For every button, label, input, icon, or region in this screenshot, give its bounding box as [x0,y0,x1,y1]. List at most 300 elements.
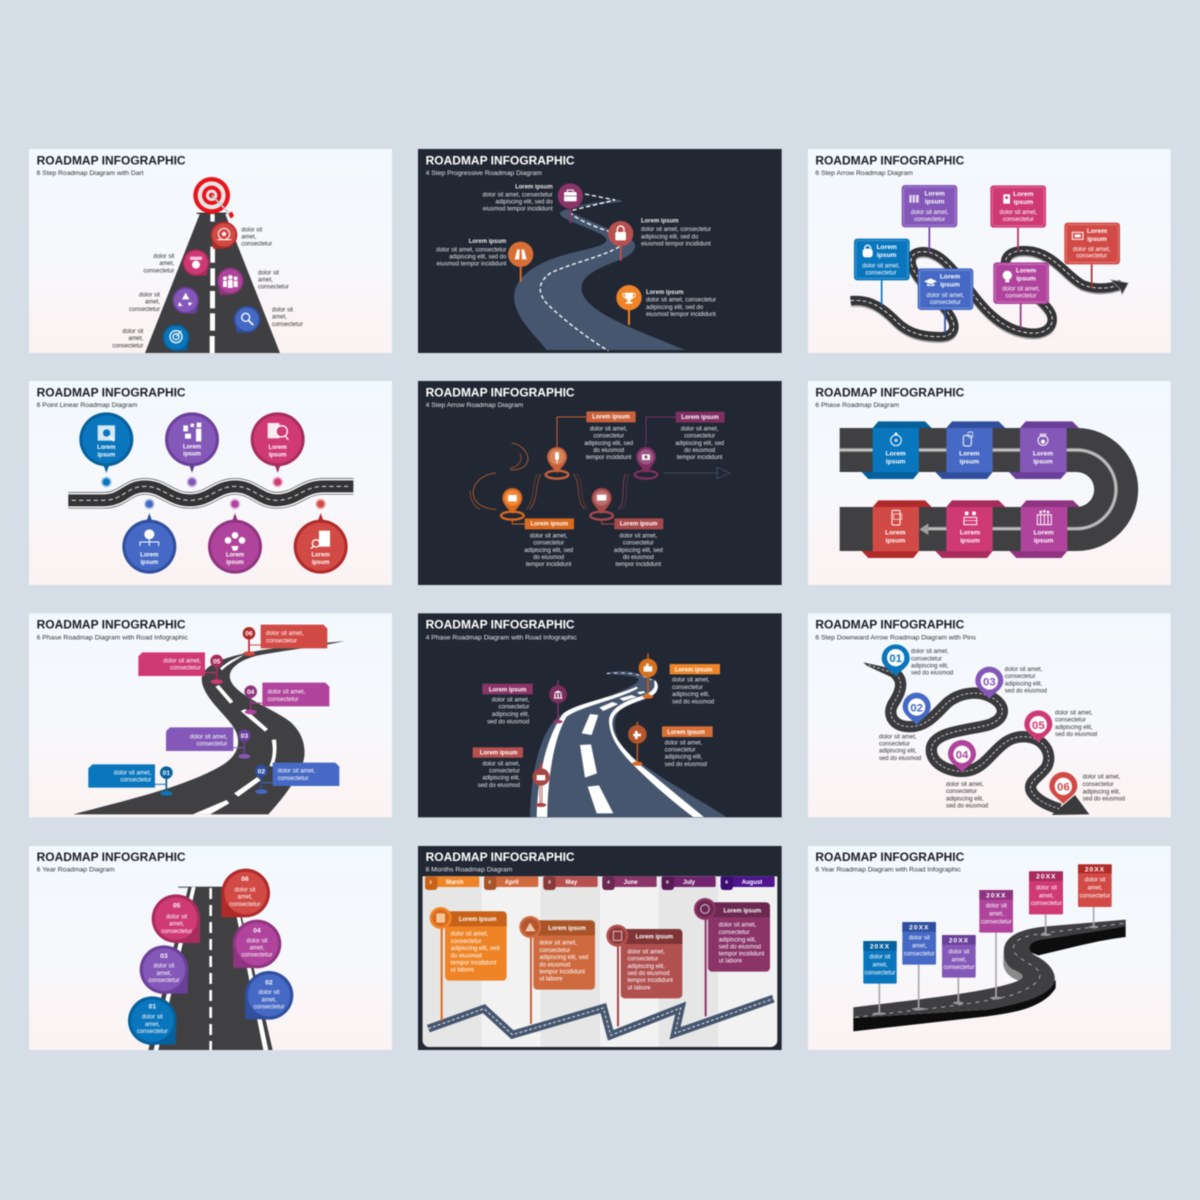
card: June: consectetur [719,930,750,936]
labels: amet, [145,300,160,306]
pin 06: 06 [1057,782,1070,794]
text blocks: adipiscing elit, [879,749,917,755]
callout: pink [138,652,205,676]
pin 05: 05 [1032,720,1045,732]
pin 01: dolor sit [142,1015,163,1021]
card: April: dolor sit amet, [539,941,577,947]
label: brown: consectetur [665,748,696,754]
card: April: tempor incididunt [539,969,585,975]
text blocks: adipiscing elit, sed do [495,199,553,205]
pin 03 [233,729,251,759]
text blocks: adipiscing elit, [946,796,984,802]
month tab: May: May [566,880,578,886]
phase: pink [935,500,1005,558]
card: blue [854,239,910,280]
marker: indigo [144,499,155,509]
card: indigo [918,268,973,310]
card: magenta: dolor sit amet, [1002,287,1040,293]
connectors [512,417,676,524]
signpost: red [1078,864,1112,928]
card: indigo: dolor sit amet, [927,293,964,299]
phase: purple [1009,421,1079,479]
label: brick: sed do eiusmod [478,783,520,789]
text blocks: adipiscing elit, [1055,725,1093,731]
label: maroon: Lorem ipsum [489,688,526,694]
subtitle: 6 Months Roadmap Diagram [426,867,513,874]
text blocks: dolor sit amet, [911,649,949,655]
pin: step 5 magenta [217,268,244,295]
label: orange: dolor sit amet, [672,678,710,684]
text blocks: adipiscing elit, [911,663,949,669]
card: magenta [993,262,1049,304]
card: March: dolor sit amet, [451,932,489,938]
card: blue: ipsum [877,252,897,259]
pin 01 [128,996,177,1045]
phase: purple: ipsum [1033,459,1053,466]
callout: blue: consectetur [120,778,151,784]
callout: indigo: dolor sit amet, [278,769,316,775]
pin 03: 03 [983,676,996,688]
signpost: indigo: amet, [912,944,927,950]
month tab: June [602,876,657,890]
pin 02: 02 [258,768,265,775]
callout: indigo [273,763,339,786]
phase: pink: ipsum [960,538,980,545]
labels: amet, [159,261,175,267]
pole: blue [879,280,884,305]
marker: pink [272,477,283,487]
card: April: consectetur [539,948,570,954]
month tab: March: March [446,880,464,886]
pin 01: 01 [889,653,902,665]
marker: purple [187,477,197,487]
label: brick: adipiscing elit, [482,776,520,782]
label: maroon: consectetur [684,434,715,440]
pin 04: 04 [253,927,261,934]
signpost: red: amet, [1088,886,1103,892]
title: ROADMAP INFOGRAPHIC [815,618,965,632]
label: brick: tempor incididunt [586,455,632,461]
pin 02: amet, [262,997,277,1003]
text blocks: dolor sit amet, [946,782,984,788]
labels: dolor sit [241,227,263,233]
signpost: indigo: consectetur [904,951,935,957]
label: brick [473,747,523,789]
pin 04 [233,920,281,968]
pin 03: 03 [241,733,248,740]
text blocks: consectetur [879,742,910,748]
marker: red [315,499,326,509]
card: March: consectetur [451,939,482,945]
callout: blue [88,764,155,788]
pin: step 6 indigo [234,306,260,333]
route arcs [470,443,629,510]
text blocks: dolor sit amet, [1005,667,1043,673]
month tab: April: 2 [488,880,491,886]
card: June: tempor incididunt [719,951,765,957]
phase: purple: Lorem [1033,451,1053,458]
labels: amet, [258,278,273,284]
subtitle: 6 Step Downward Arrow Roadmap Diagram with Pins [815,634,977,641]
signpost: magenta: amet, [989,912,1004,918]
phase: magenta [1010,500,1080,558]
card: March: ut labore [451,968,475,974]
panel: 6 step roadmap with dart [29,149,392,353]
card: pink: dolor sit amet, [1000,210,1037,216]
text blocks [436,185,716,318]
card: March [430,907,507,1021]
pin 05: dolor sit [166,914,187,920]
labels: consectetur [258,285,289,291]
title: ROADMAP INFOGRAPHIC [815,153,965,167]
balloon: magenta [208,513,262,574]
card: purple: Lorem [924,191,945,198]
card: June: ut labore [719,959,743,965]
pin 06: consectetur [230,902,260,908]
card: indigo: ipsum [940,282,960,289]
pin 05: 05 [213,658,221,665]
callout: indigo: consectetur [278,776,309,782]
pole: magenta [1018,304,1023,328]
balloon: indigo: ipsum [141,560,158,566]
text blocks: consectetur [946,789,977,795]
label: maroon: do eiusmod [684,448,715,454]
label: brick: Lorem ipsum [592,415,630,421]
label: orange [524,518,574,568]
card: purple: ipsum [925,199,945,206]
label: maroon: Lorem ipsum [681,415,719,421]
pin 02 [255,765,273,794]
card: May: ut labore [627,986,651,992]
labels: dolor sit [139,293,160,299]
pin 03: 03 [160,953,168,960]
card: April: do eiusmod [539,962,570,968]
card: April: ut labore [539,977,563,983]
month tab: August: 6 [725,880,728,886]
card: May: sed do eiusmod [627,971,670,977]
label: brown: adipiscing elit, [665,755,703,761]
panel: 6 year roadmap with road [808,846,1171,1050]
pin: brick [532,763,550,807]
phase: indigo [935,421,1005,479]
labels: consectetur [129,307,160,313]
text blocks: consectetur [1055,718,1086,724]
balloon: indigo: Lorem [140,553,158,559]
month tab: August: August [742,880,762,886]
pin 06: 06 [245,631,253,638]
pin 04: 04 [247,689,255,696]
subtitle: 6 Year Roadmap Diagram with Road Infographic [815,867,961,874]
phase: blue [862,421,932,479]
pole: indigo [942,310,947,333]
pin 01: consectetur [137,1029,168,1035]
text blocks [879,649,1125,809]
pin: rust [590,488,613,520]
timeline background columns [423,876,777,1047]
phase: pink: Lorem [960,530,980,537]
text blocks: adipiscing elit, sed do [641,234,699,240]
balloon: pink [251,412,305,473]
label: rust [614,518,663,568]
road [145,213,280,353]
card: indigo: Lorem [940,274,960,281]
pin 01 [882,644,910,676]
text blocks: consectetur [911,656,942,662]
road [73,641,345,814]
balloon: red [294,513,348,574]
panel: 4 step progressive roadmap [418,149,782,353]
card: June: sed do eiusmod [719,944,761,950]
balloon: blue: Lorem [97,445,115,451]
text blocks: adipiscing elit, [1005,681,1043,687]
title: ROADMAP INFOGRAPHIC [426,850,575,864]
month tab: August [721,876,775,890]
signpost: pink [1029,871,1063,936]
card: June: Lorem ipsum [724,908,761,914]
callout: red [261,625,327,648]
pin: brown [628,722,647,766]
label: rust: Lorem ipsum [620,522,657,528]
signpost: indigo [902,922,936,1010]
text blocks: dolor sit amet, consectetur [646,298,716,304]
balloon: purple: Lorem [183,444,201,450]
labels: amet, [128,336,144,342]
pin 06 [221,869,270,917]
pin 03: dolor sit [154,964,175,970]
signpost: magenta: consectetur [981,919,1012,925]
label: rust: tempor incididunt [616,562,661,568]
signpost: magenta: dolor sit [986,904,1007,910]
card: June: adipiscing elit, [719,937,757,943]
road with arrow [863,662,1089,815]
pin 02: 02 [910,702,923,714]
label: maroon: adipiscing elit, sed [675,441,724,447]
title: ROADMAP INFOGRAPHIC [37,850,186,864]
card: blue: dolor sit amet, [862,263,900,269]
phase: indigo: Lorem [959,451,980,458]
title: ROADMAP INFOGRAPHIC [815,385,965,399]
signpost: indigo: 20XX [909,924,929,931]
label: orange: consectetur [672,685,703,691]
text blocks: dolor sit amet, consectetur [482,192,553,198]
pin 04: dolor sit [247,938,268,944]
panel: 6 step downward arrow with pins [808,613,1171,817]
label: rust: consectetur [623,541,654,547]
card: May: dolor sit amet, [627,949,665,955]
label: brown: dolor sit amet, [665,740,703,746]
labels: consectetur [112,343,143,349]
balloon: red: Lorem [312,553,330,559]
title: ROADMAP INFOGRAPHIC [37,618,186,632]
3D road [853,920,1126,1031]
label: orange: dolor sit amet, [530,534,568,540]
card: April: adipiscing elit, sed [539,955,588,961]
signpost: blue: dolor sit [870,955,891,961]
subtitle: 4 Step Arrow Roadmap Diagram [426,402,524,409]
signpost: magenta: 20XX [986,892,1006,899]
text blocks: dolor sit amet, [879,734,917,740]
phase: magenta: Lorem [1033,530,1054,537]
signpost: blue [863,941,897,1015]
card: May: tempor incididunt [627,978,673,984]
balloon: pink: Lorem [269,445,287,451]
pin 04 [948,740,976,772]
balloon: purple: ipsum [183,452,201,458]
signpost: blue: consectetur [865,970,895,976]
phase: red [862,500,932,558]
pin 05: amet, [169,922,184,928]
labels: dolor sit [258,271,279,277]
wavy road [68,486,353,500]
panel: 6 phase roadmap with road [29,613,392,817]
card: red [1064,223,1120,264]
pin 03 [140,945,188,994]
subtitle: 6 Step Roadmap Diagram with Dart [37,170,144,177]
pin 03: amet, [157,971,172,977]
label: orange: adipiscing elit, sed [524,548,573,554]
month tab: July: July [683,880,696,886]
subtitle: 6 Step Arrow Roadmap Diagram [815,170,913,177]
label: brick: dolor sit amet, [482,761,520,767]
marker: blue [101,477,112,487]
text blocks: eiusmod tempor incididunt [436,262,507,268]
label: brick: do eiusmod [593,448,624,454]
text blocks: adipiscing elit, sed do [449,254,507,260]
callout: magenta [262,683,329,706]
pin: orange [501,488,524,520]
card: April [519,916,595,1024]
text blocks: eiusmod tempor incididunt [483,206,553,212]
card: purple [902,185,957,227]
signpost: blue: 20XX [870,943,890,950]
labels: dolor sit [272,308,293,314]
text blocks: dolor sit amet, [1083,775,1121,781]
label: brick: adipiscing elit, sed [584,441,633,447]
pin 04: 04 [956,750,969,762]
pin 02: 02 [265,979,273,986]
title: ROADMAP INFOGRAPHIC [426,153,575,167]
icon: dart target [193,177,234,219]
card: March: do eiusmod [451,953,482,959]
balloon: pink: ipsum [269,452,286,458]
signpost: red: dolor sit [1085,878,1106,884]
label: maroon: sed do eiusmod [487,719,529,725]
signpost: pink: 20XX [1036,874,1056,881]
panel: 4 step arrow roadmap [418,381,782,585]
card: red: consectetur [1076,253,1107,259]
label: rust: dolor sit amet, [620,534,657,540]
callout: blue: dolor sit amet, [114,770,152,776]
pin 06 [1049,772,1077,804]
label: maroon: consectetur [498,705,529,711]
labels: amet, [272,315,287,321]
card: purple: consectetur [914,217,945,223]
label: brick: dolor sit amet, [590,427,628,433]
subtitle: 4 Phase Roadmap Diagram with Road Infographic [426,634,577,641]
labels: amet, [241,234,257,240]
card: indigo: consectetur [930,300,961,306]
card: magenta: ipsum [1016,276,1036,283]
pin 01: 01 [163,770,170,777]
callout: pink: consectetur [170,666,201,672]
text blocks: consectetur [1005,674,1036,680]
label: maroon: tempor incididunt [677,455,723,461]
zigzag road [428,999,773,1035]
label: rust: do eiusmod [623,555,654,561]
pin: step 3 pink [183,249,209,276]
label: maroon: dolor sit amet, [681,427,719,433]
card: June [694,898,770,1016]
label: orange: Lorem ipsum [531,522,568,528]
pin: step 4 red [211,222,237,249]
labels: consectetur [241,242,272,248]
road [530,671,727,817]
label: orange: consectetur [533,541,564,547]
balloon: blue [79,412,133,473]
text blocks: Lorem ipsum [515,185,553,191]
labels: dolor sit [153,254,175,260]
subtitle: 6 Phase Roadmap Diagram with Road Infographic [37,634,188,641]
card: blue: Lorem [876,244,897,251]
label: orange [670,664,720,705]
panel: 6 phase roadmap [808,381,1171,585]
signpost: purple [942,935,976,1004]
month tab: May: 3 [548,880,551,886]
pin 06: dolor sit [235,887,256,893]
pin: step 2 purple [172,287,199,314]
pin 01: amet, [145,1022,160,1028]
text blocks: sed do eiusmod [911,671,953,677]
text blocks: Lorem ipsum [469,239,506,245]
phase: red: ipsum [886,538,905,545]
panel: 6 step arrow roadmap [808,149,1171,353]
pole: pink [1015,228,1020,250]
signpost: purple: 20XX [949,937,969,944]
signpost: red: 20XX [1085,866,1105,873]
card: pink: Lorem [1013,191,1034,198]
month tab: June: 4 [607,880,610,886]
phase: magenta: ipsum [1034,538,1054,545]
pin: trophy [616,285,642,325]
month tab: July [662,876,716,890]
signpost: pink: consectetur [1031,901,1062,907]
text blocks: sed do eiusmod [946,803,988,809]
pin 05 [1024,710,1052,742]
road with arrow [851,251,1128,338]
text blocks: dolor sit amet, consectetur [436,247,506,253]
pin: orange [639,653,657,699]
title: ROADMAP INFOGRAPHIC [37,385,186,399]
phase: blue: ipsum [886,459,906,466]
pin 03 [975,667,1003,699]
signpost: pink: amet, [1039,893,1054,899]
label: orange: adipiscing elit, [672,692,710,698]
text blocks: adipiscing elit, [1083,789,1121,795]
card: June: dolor sit amet, [719,923,757,929]
month tab: June: June [624,880,638,886]
label: orange: sed do eiusmod [672,699,714,705]
road [514,194,685,351]
labels: dolor sit [122,329,144,335]
label: brick: consectetur [593,434,624,440]
U-shaped road [840,428,1138,551]
card: May: adipiscing elit, [627,964,665,970]
label: brown: Lorem ipsum [667,730,705,736]
month tab: April: April [505,880,519,886]
card: red: Lorem [1087,228,1107,235]
card: blue: consectetur [866,270,896,276]
phase: red: Lorem [885,530,906,537]
